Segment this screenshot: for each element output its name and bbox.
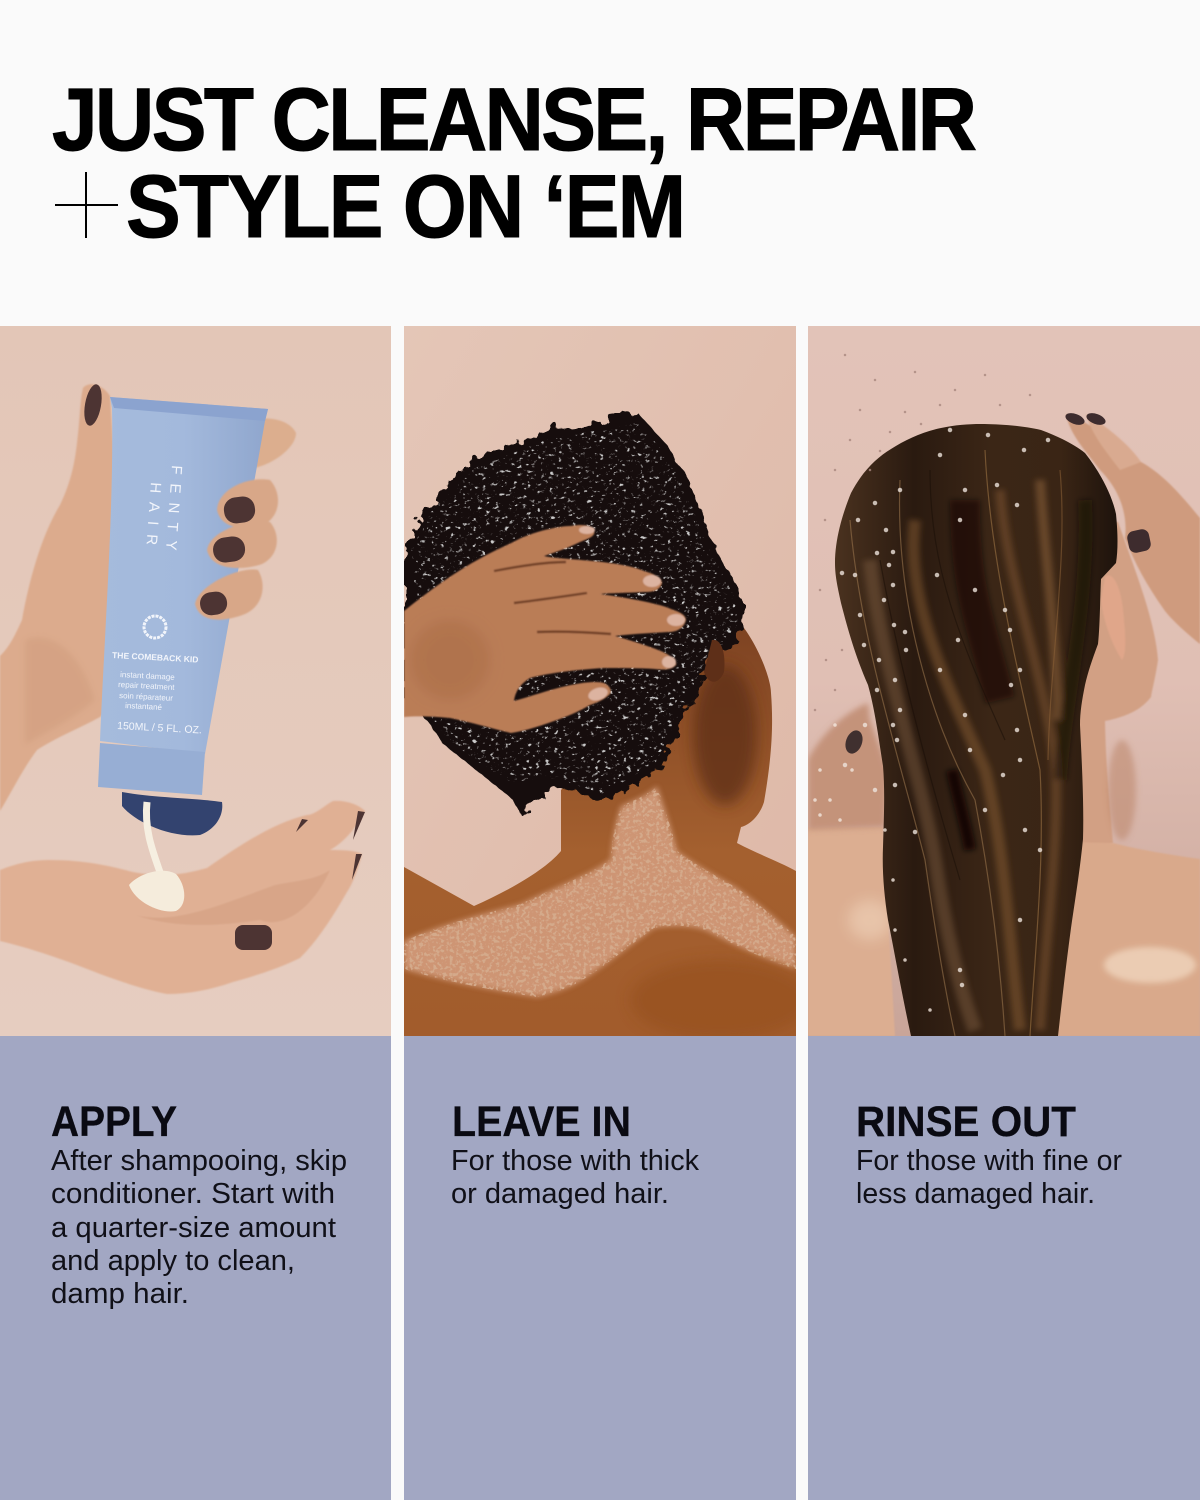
icon: ear — [704, 640, 724, 682]
text block: leave in instructions: For those with thick — [451, 1145, 699, 1177]
icon: cream — [129, 802, 184, 911]
icon: tube: repair treatment — [118, 680, 176, 692]
icon: neck, head and shoulders — [404, 628, 810, 1040]
icon: tube: 150ML / 5 FL. OZ. — [117, 720, 202, 736]
text block: apply instructions — [51, 1145, 347, 1310]
title — [52, 70, 977, 257]
icon: upper hand holding tube — [0, 384, 296, 811]
text block: leave in instructions — [451, 1145, 699, 1210]
icon: curly hair — [404, 412, 744, 815]
title: JUST CLEANSE, REPAIR — [52, 70, 977, 170]
icon: tube: soin réparateur — [119, 691, 173, 703]
icon: tube: HAIR — [142, 482, 164, 555]
panel: rinse out photo — [808, 326, 1200, 1036]
text block: rinse out instructions: For those with fine or — [856, 1145, 1122, 1177]
icon: tube — [98, 397, 268, 795]
icon: long wet hair — [835, 424, 1118, 1036]
panel: leave in photo — [404, 326, 810, 1040]
title: STYLE ON ‘EM — [126, 157, 686, 257]
text block: rinse out instructions: less damaged hair. — [856, 1178, 1095, 1210]
text block: rinse out instructions — [856, 1145, 1122, 1210]
text block: apply instructions: a quarter-size amount — [51, 1212, 336, 1244]
text block: leave in instructions: or damaged hair. — [451, 1178, 669, 1210]
text block: apply instructions: damp hair. — [51, 1278, 189, 1310]
icon: tube: FENTY — [161, 465, 185, 560]
icon: fingers wrapped round tube — [195, 479, 278, 620]
heading: apply: APPLY — [51, 1098, 177, 1146]
panel: apply photo — [0, 326, 391, 1036]
icon: back — [808, 827, 1200, 1036]
panel: leave in text — [404, 1036, 796, 1500]
panel: rinse out text — [808, 1036, 1200, 1500]
text block: apply instructions: After shampooing, skip — [51, 1145, 347, 1177]
heading: rinse out: RINSE OUT — [856, 1098, 1076, 1146]
water droplets — [815, 355, 1048, 1010]
icon: cap — [122, 792, 222, 835]
icon: tube: instantané — [125, 701, 163, 712]
heading: leave in: LEAVE IN — [452, 1098, 631, 1146]
text block: apply instructions: conditioner. Start with — [51, 1178, 335, 1210]
icon: upper right hand — [1066, 414, 1200, 644]
icon: hand in hair — [404, 525, 686, 733]
icon: tube: instant damage — [120, 670, 176, 682]
icon: tube: THE COMEBACK KID — [112, 650, 199, 665]
icon: left hand behind water — [808, 703, 888, 830]
icon: neck and head — [1080, 522, 1158, 844]
icon: fingernails — [81, 383, 365, 950]
text block: apply instructions: and apply to clean, — [51, 1245, 295, 1277]
icon: fingernails — [1064, 411, 1152, 554]
icon: lower hand — [0, 801, 365, 994]
panel: apply text — [0, 1036, 391, 1500]
